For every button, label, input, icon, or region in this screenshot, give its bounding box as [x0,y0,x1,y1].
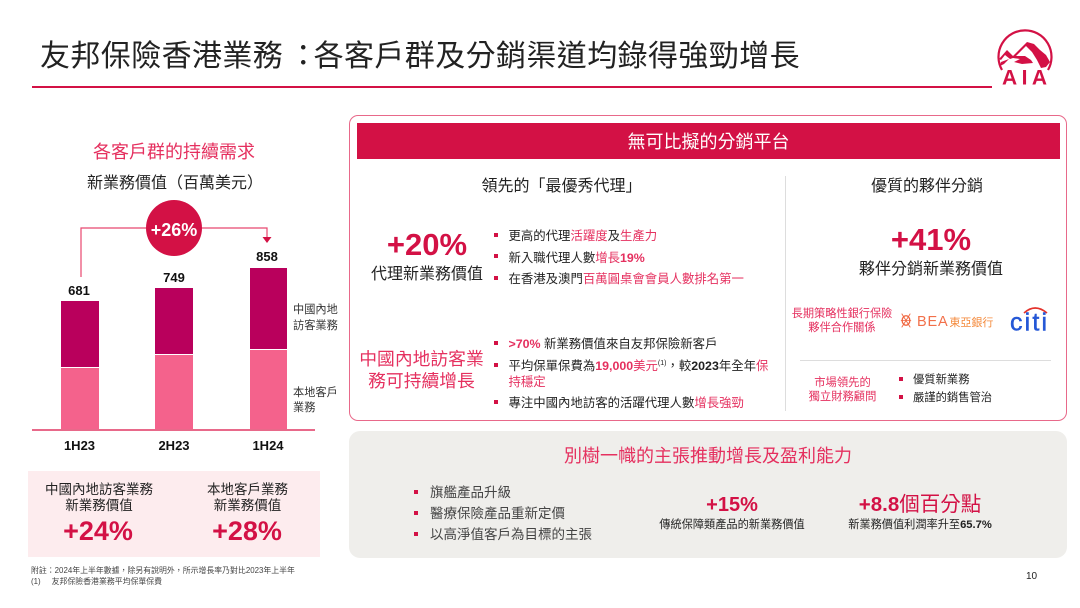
growth arrow [80,227,272,277]
x axis [32,429,315,430]
bullets: propositions [414,485,592,542]
BEA wordmark: BEA東亞銀行 [917,314,993,330]
stat: VONB margin [848,493,992,530]
subheading: VONB unit: 新業務價值（百萬美元） [87,175,263,192]
bullets: mainland visitors: 平均保單保費為19,000美元(1)，較2023年全年保 [508,359,768,373]
label: bancassurance [792,307,892,334]
segment domestic [155,355,193,430]
title underline [32,86,992,88]
footnote: (1) 友邦保險香港業務平均保單保費 [31,576,162,586]
bullet 1 [494,233,498,237]
stat: protection VONB [659,494,805,530]
subheading: mainland visitors growth: 務可持續增長 [368,370,475,390]
icon: BEA emblem [900,313,912,328]
stat label [207,482,288,513]
legend domestic: 業務 [293,402,315,414]
stat label: 新業務價值利潤率升至65.7% [848,518,992,530]
bar chart [32,200,338,453]
bullet 1 [414,490,418,494]
segment domestic [61,368,99,430]
panel: distribution platform [349,115,1067,421]
bullets: IFA [899,373,992,404]
column heading: 領先的「最優秀代理」 [482,178,642,195]
bullet 2 [494,254,498,258]
growth badge [146,200,202,256]
panel header [357,123,1060,159]
label: IFA [809,376,876,402]
label: bancassurance: 夥伴合作關係 [808,322,876,334]
bullet 2 [414,511,418,515]
segment domestic [250,350,287,430]
stat value: +15% [706,494,758,516]
growth badge: +26% [151,220,197,240]
segment mainland visitors [61,301,99,367]
bullets: propositions: 旗艦產品升級 [430,485,511,500]
bullet 2 [494,363,498,367]
bullets: propositions: 醫療保險產品重新定價 [430,506,565,521]
bar 1H23 [61,283,99,429]
subheading: mainland visitors growth [359,349,484,390]
heading: customer demand: 各客戶群的持續需求 [93,142,255,162]
label 1H23: 1H23 [64,438,95,453]
bullet 1 [494,341,498,345]
label: IFA: 獨立財務顧問 [809,390,876,402]
label 2H23: 2H23 [158,438,190,453]
stat label: 傳統保障類產品的新業務價值 [659,518,805,530]
column: partnership [792,177,1051,404]
panel header: 無可比擬的分銷平台 [628,132,790,152]
bullets: mainland visitors: >70% 新業務價值來自友邦保險新客戶 [508,337,717,351]
column: agency [359,177,768,410]
label: IFA: 市場領先的 [814,377,871,389]
bullets: agency [494,229,744,286]
column divider [785,176,786,411]
bullets: IFA: 嚴謹的銷售管治 [913,392,992,404]
stat value: +41% [891,222,971,257]
legend mainland visitors: 中國內地 [293,304,338,316]
bullet 3 [414,532,418,536]
bullets: agency: 在香港及澳門百萬圓桌會會員人數排名第一 [508,272,744,286]
bullets: IFA: 優質新業務 [913,374,970,386]
panel: segment growth [28,471,320,557]
bullet 3 [494,400,498,404]
bullets: agency: 更高的代理活躍度及生產力 [508,229,657,243]
icon: AIA logo [997,29,1053,90]
stat label: 新業務價值 [65,498,133,513]
panel heading: 別樹一幟的主張推動增長及盈利能力 [564,446,852,466]
stat value: +28% [212,516,282,546]
partnership divider [800,360,1051,361]
page number: 10 [1026,571,1037,582]
column heading: 優質的夥伴分銷 [871,178,983,195]
legend domestic: 本地客戶 [293,387,338,399]
bullet 1 [899,377,902,380]
bullets: propositions: 以高淨值客戶為目標的主張 [430,527,592,542]
stat label: 新業務價值 [214,498,281,513]
segment mainland visitors [155,288,193,354]
logo: BEA [900,313,993,330]
segment mainland visitors [250,268,287,349]
value 749: 749 [163,270,185,285]
icon: AIA logo: AIA [1002,66,1047,90]
value 858: 858 [256,249,278,264]
legend mainland visitors: 訪客業務 [293,320,338,332]
stat label: 代理新業務價值 [371,266,483,283]
bullets: mainland visitors: 專注中國內地訪客的活躍代理人數增長強勁 [508,396,744,410]
footnote [31,566,295,586]
bullets: mainland visitors: 持穩定 [508,374,546,388]
panel: differentiated propositions [349,431,1067,558]
bar 1H24 [250,249,287,429]
label: bancassurance: 長期策略性銀行保險 [792,308,892,320]
bar 2H23 [155,270,193,429]
stat label: 本地客戶業務 [207,482,288,496]
value 681: 681 [68,283,90,298]
stat label: 中國內地訪客業務 [45,482,153,496]
stat value: +24% [63,516,133,546]
stat value: +20% [387,227,467,262]
bullets: mainland visitors [494,337,768,410]
stat: mainland visitors [45,482,153,546]
bullet 3 [494,276,498,280]
title: 友邦保險香港業務：各客戶群及分銷渠道均錄得強勁增長 [40,40,800,73]
stat label [45,482,153,513]
label 1H24: 1H24 [252,438,284,453]
stat label: 夥伴分銷新業務價值 [859,260,1003,278]
stat: domestic [207,482,288,546]
bullet 2 [899,395,902,398]
stat: agency VONB [371,227,483,283]
legend domestic [293,386,338,414]
footnote: 附註：2024年上半年數據，除另有說明外，所示增長率乃對比2023年上半年 [31,566,295,575]
stat value: +8.8個百分點 [859,493,981,516]
legend mainland visitors [293,303,338,332]
bullets: agency: 新入職代理人數增長19% [508,250,645,264]
subheading: mainland visitors growth: 中國內地訪客業 [359,349,484,369]
